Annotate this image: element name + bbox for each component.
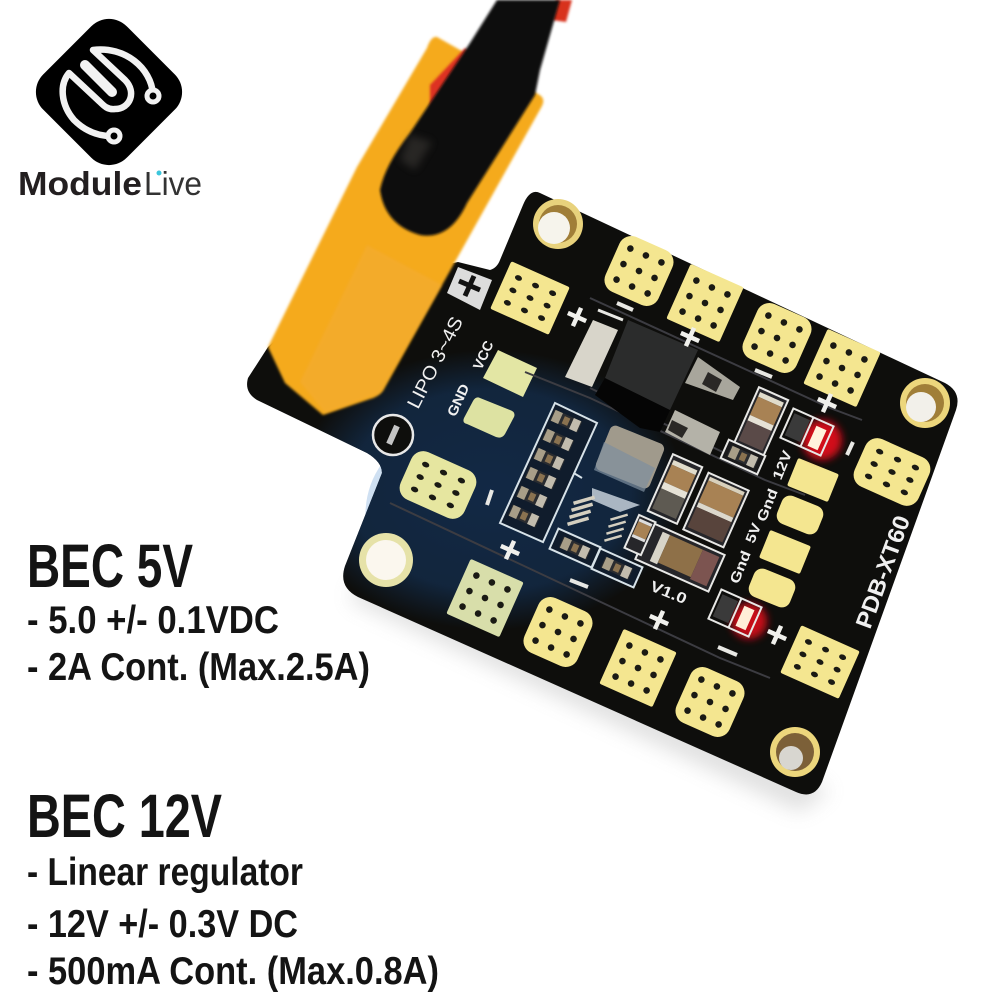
PCB board bbox=[247, 192, 958, 794]
resistor G bbox=[550, 529, 600, 567]
resistor F bbox=[721, 440, 765, 474]
blue watermark tint bbox=[324, 356, 670, 623]
small IC pins bbox=[567, 496, 628, 542]
cap B bbox=[683, 473, 749, 547]
plus box bbox=[447, 267, 492, 310]
silkscreen labels: Gnd bbox=[753, 486, 781, 524]
silkscreen traces bbox=[390, 298, 862, 678]
watermark fragment bbox=[365, 462, 383, 528]
XT60 connector bbox=[268, 0, 572, 415]
inductor bbox=[572, 422, 666, 512]
mounting holes bbox=[359, 199, 950, 777]
spec line: current: - 500mA Cont. (Max.0.8A) bbox=[27, 950, 439, 993]
power pads bbox=[463, 350, 839, 610]
lead pads bbox=[685, 357, 740, 400]
silver tab bbox=[565, 320, 618, 387]
logo: Live bbox=[144, 165, 202, 202]
spec line: voltage: - 12V +/- 0.3V DC bbox=[27, 903, 298, 946]
cap A bbox=[648, 454, 702, 524]
spec block: BEC 5V bbox=[27, 532, 370, 689]
silkscreen labels: VCC bbox=[469, 338, 497, 372]
spec line: voltage: - 5.0 +/- 0.1VDC bbox=[27, 599, 279, 642]
silkscreen labels: PDB-XT60 bbox=[850, 512, 915, 632]
LEDs bbox=[708, 408, 842, 639]
board shadow bbox=[350, 580, 830, 812]
board body bbox=[247, 192, 958, 794]
connector body bbox=[268, 37, 543, 415]
logo circuit mark bbox=[63, 50, 159, 142]
silkscreen labels: LIPO 3~4S bbox=[404, 314, 468, 412]
spec line: regulator: - Linear regulator bbox=[27, 851, 303, 894]
silkscreen labels bbox=[404, 314, 915, 632]
connector red wire bbox=[430, 48, 480, 118]
logo diamond bbox=[26, 9, 192, 175]
resistor H bbox=[592, 549, 642, 587]
cable highlight bbox=[400, 135, 432, 170]
logo wordmark: Module bbox=[18, 165, 142, 202]
cap E bbox=[624, 515, 656, 555]
shadow under body bbox=[595, 378, 670, 432]
cap C bbox=[635, 522, 725, 592]
polarity marks bbox=[487, 303, 853, 655]
silkscreen labels: V1.0 bbox=[648, 578, 689, 608]
silkscreen labels: Gnd bbox=[726, 548, 754, 586]
minus circle bbox=[373, 415, 413, 455]
silkscreen labels: GND bbox=[444, 381, 472, 419]
silkscreen labels: 5V bbox=[742, 520, 764, 545]
spec block: BEC 12V bbox=[27, 782, 439, 993]
silkscreen labels: 12V bbox=[769, 447, 795, 482]
resistor column bbox=[500, 403, 597, 542]
heading: BEC 12V: BEC 12V bbox=[27, 782, 222, 850]
cap D bbox=[734, 387, 788, 457]
regulator IC bbox=[565, 320, 740, 455]
connector front face bbox=[300, 245, 442, 413]
ESC solder pads bbox=[395, 232, 935, 741]
capacitors bbox=[550, 387, 788, 592]
spec line: current: - 2A Cont. (Max.2.5A) bbox=[27, 646, 370, 689]
heading: BEC 5V: BEC 5V bbox=[27, 532, 193, 600]
body bbox=[605, 320, 698, 410]
black cable bbox=[380, 0, 560, 236]
logo bbox=[18, 9, 202, 202]
